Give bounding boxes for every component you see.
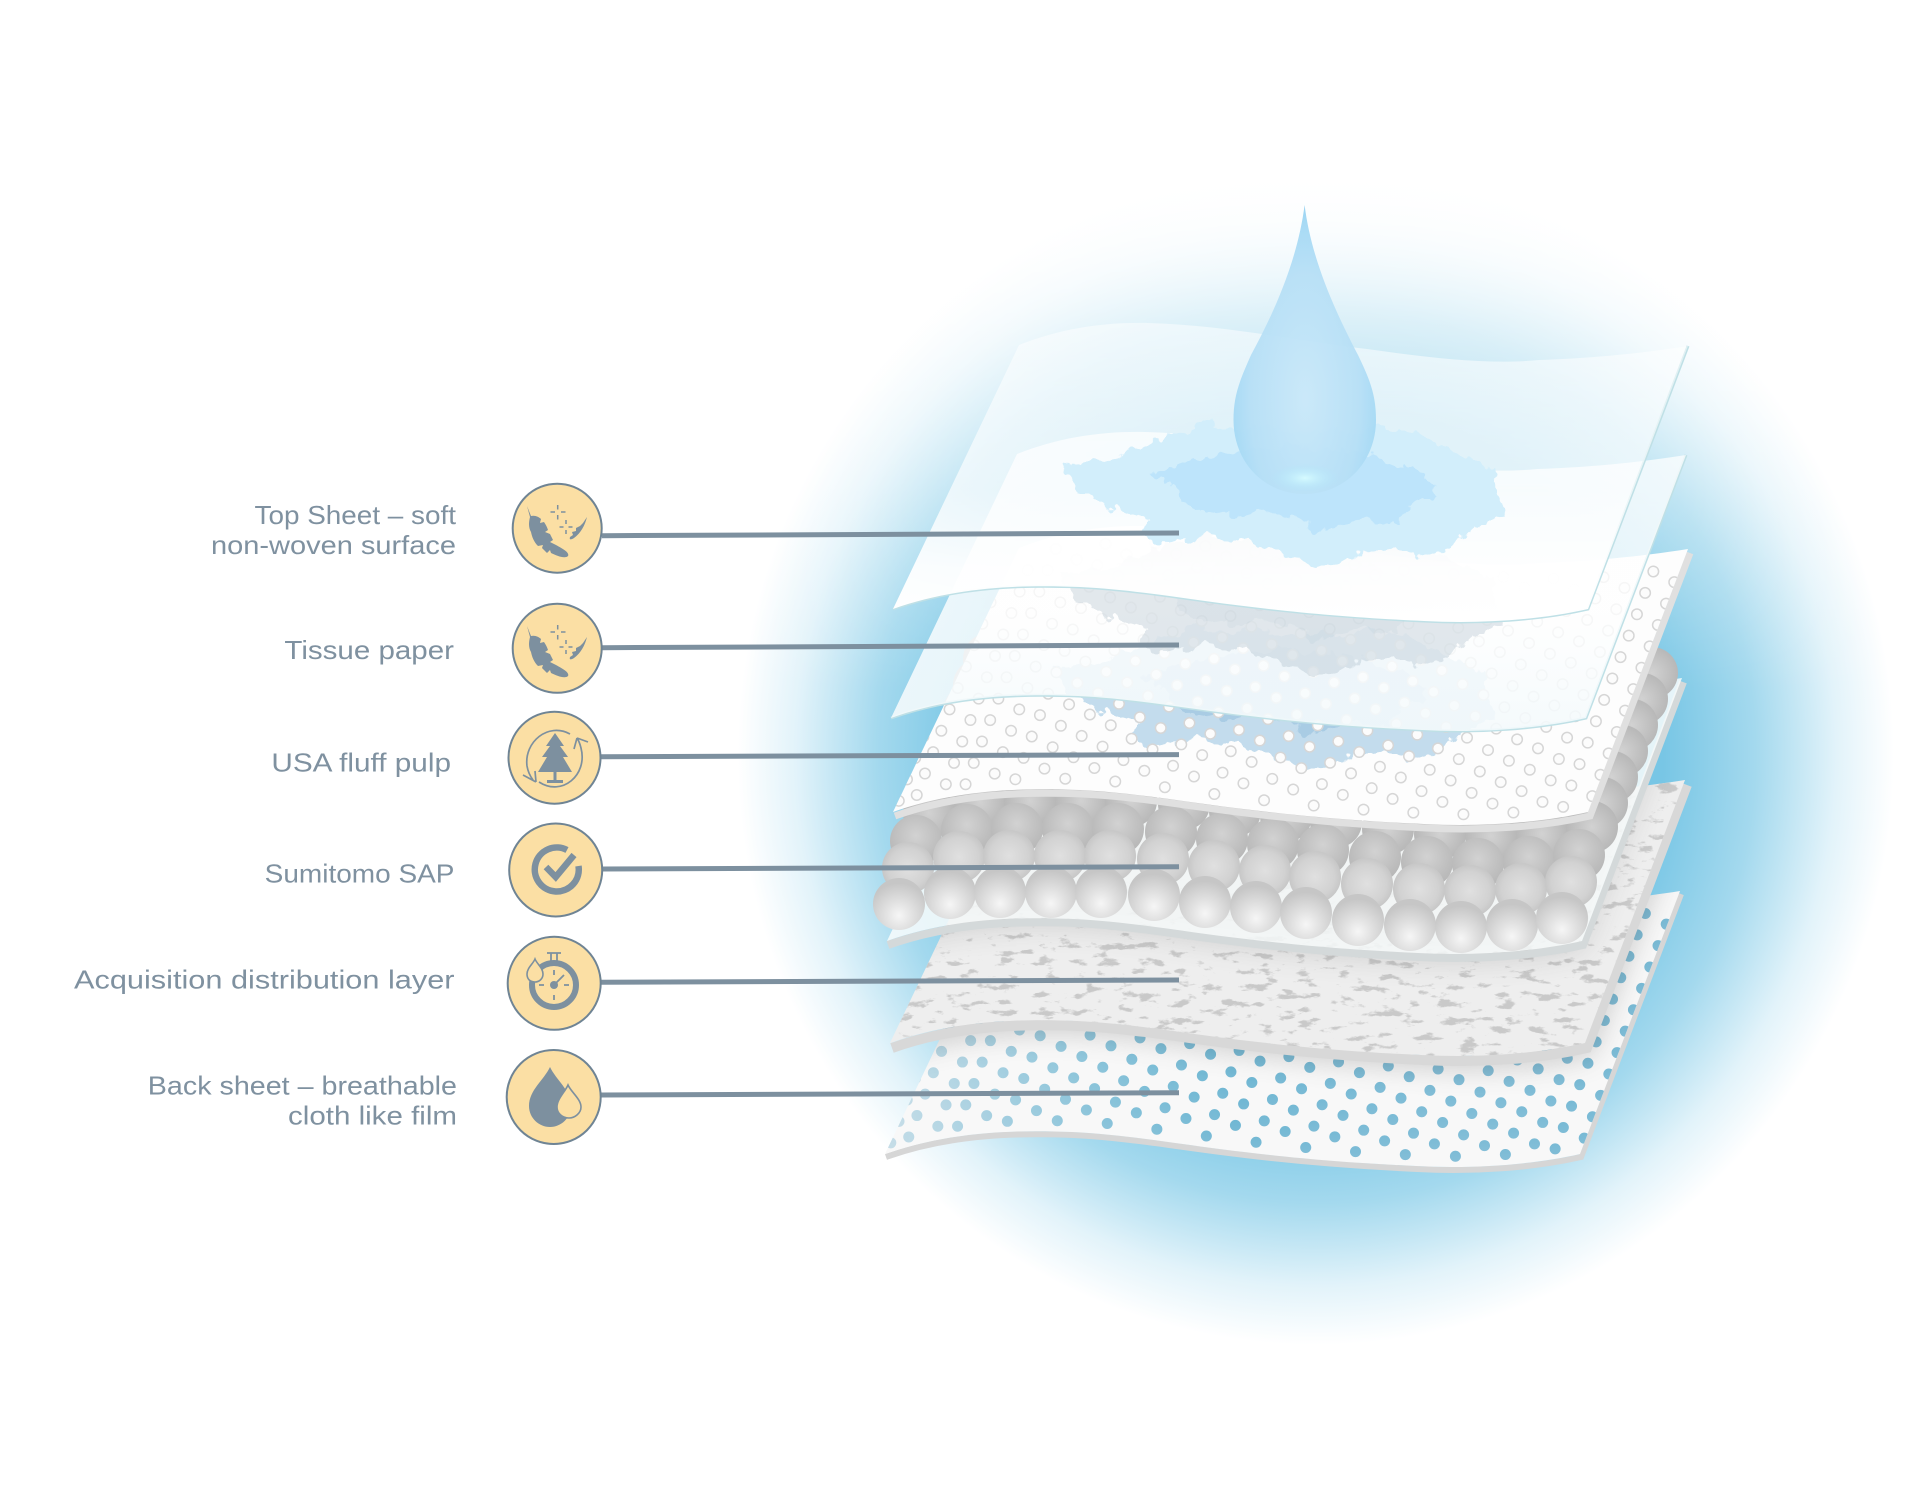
layer: acquisition distribution layer with speckled texture (890, 780, 1692, 1066)
icon: feathers (tissue paper) (513, 604, 602, 693)
layer: back sheet with teal perforations (885, 891, 1684, 1173)
icon: stopwatch with droplet (508, 937, 601, 1030)
label: back sheet (148, 1070, 457, 1130)
icon: check mark in ring (509, 824, 602, 916)
label: back sheet: cloth like film (288, 1100, 457, 1130)
label: top sheet (211, 500, 457, 560)
label: back sheet: Back sheet – breathable (148, 1070, 457, 1100)
rows of absorbent spheres (873, 621, 1678, 953)
layer: fluff pulp dotted sheet (893, 549, 1694, 832)
layer: top sheet translucent with water stain (893, 323, 1688, 622)
wet stain seen through tissue (1070, 588, 1503, 677)
label: USA fluff pulp: USA fluff pulp (271, 748, 451, 778)
layer: tissue paper translucent sheet (891, 432, 1686, 731)
layer: SAP beads on base sheet (873, 621, 1683, 958)
base sheet under beads (887, 655, 1683, 958)
label: acquisition distribution layer: Acquisition distribution layer (74, 964, 455, 994)
icon: feathers (top sheet) (513, 484, 602, 573)
label: tissue paper: Tissue paper (284, 635, 454, 665)
water stain on top sheet (1065, 422, 1510, 572)
label: Sumitomo SAP: Sumitomo SAP (265, 858, 454, 888)
connector lines (600, 533, 1179, 1095)
background blue glow (700, 150, 1920, 1345)
icon: tree with recycling arrows (508, 712, 600, 804)
water drop (1234, 205, 1376, 494)
icon: two droplets (507, 1050, 601, 1144)
label: top sheet: Top Sheet – soft (254, 500, 457, 530)
wet stain on pulp sheet (1052, 640, 1487, 771)
label: top sheet: non-woven surface (211, 530, 456, 560)
